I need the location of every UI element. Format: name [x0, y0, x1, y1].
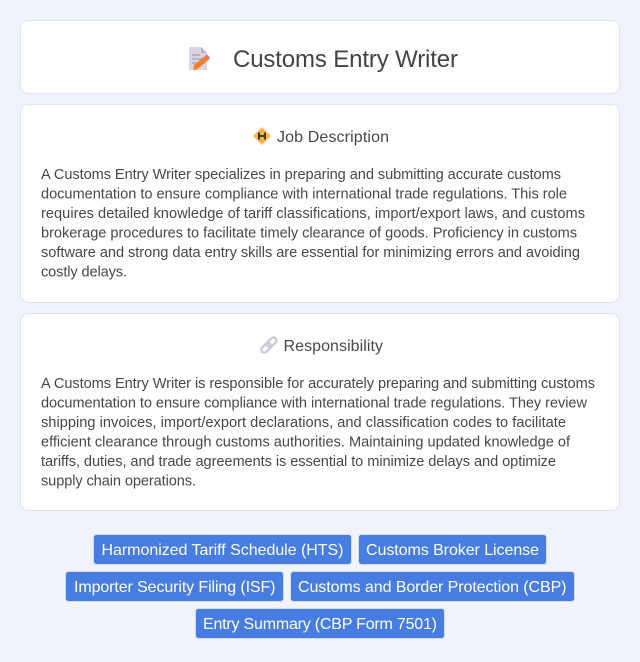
text block: job description — [41, 167, 585, 280]
tag: harmonized tariff schedule — [94, 534, 352, 564]
tag: customs and border protection: Customs and Border Protection (CBP) — [298, 579, 566, 596]
text block: job description: requires detailed knowledge of tariff classifications, import/export laws, and customs — [41, 206, 585, 222]
tag: customs broker license — [358, 534, 546, 564]
text block: job description: costly delays. — [41, 264, 127, 280]
panel: title header — [20, 20, 620, 94]
tag: importer security filing — [66, 572, 284, 602]
tag: customs broker license: Customs Broker License — [366, 542, 539, 559]
icon: document with pencil — [189, 47, 210, 70]
text block: responsibility: shipping invoices, import/export declarations, and classification codes to facilitate — [41, 415, 566, 431]
text block: job description: documentation to ensure compliance with international trade regulations. This role — [41, 186, 567, 202]
title: Customs Entry Writer — [233, 46, 458, 73]
panel: job description — [20, 104, 620, 302]
text block: responsibility: documentation to ensure compliance with international trade regulations. They review — [41, 396, 587, 412]
heading: job description: Job Description — [277, 129, 389, 146]
tag: entry summary: Entry Summary (CBP Form 7501) — [203, 616, 437, 633]
tag group: skills — [66, 534, 574, 638]
tag: customs and border protection — [290, 572, 574, 602]
icon: chain link — [260, 336, 278, 354]
icon: diamond road sign — [254, 128, 270, 144]
tag: harmonized tariff schedule: Harmonized Tariff Schedule (HTS) — [102, 542, 344, 559]
text block: responsibility: tariffs, duties, and trade agreements is essential to minimize delays and optimize — [41, 454, 556, 470]
text block: responsibility: efficient clearance through customs authorities. Maintaining updated knowledge of — [41, 434, 571, 450]
text block: job description: software and strong data entry skills are essential for minimizing errors and avoiding — [41, 245, 580, 261]
text block: responsibility — [41, 376, 595, 490]
text block: job description: A Customs Entry Writer specializes in preparing and submitting accurate customs — [41, 167, 561, 183]
text block: responsibility: supply chain operations. — [41, 474, 196, 490]
text block: responsibility: A Customs Entry Writer is responsible for accurately preparing and submitting customs — [41, 376, 595, 392]
heading: responsibility: Responsibility — [284, 338, 383, 355]
tag: importer security filing: Importer Security Filing (ISF) — [74, 579, 276, 596]
panel: responsibility — [20, 314, 620, 510]
tag: entry summary — [196, 608, 444, 638]
text block: job description: brokerage procedures to facilitate timely clearance of goods. Proficiency in customs — [41, 226, 577, 242]
